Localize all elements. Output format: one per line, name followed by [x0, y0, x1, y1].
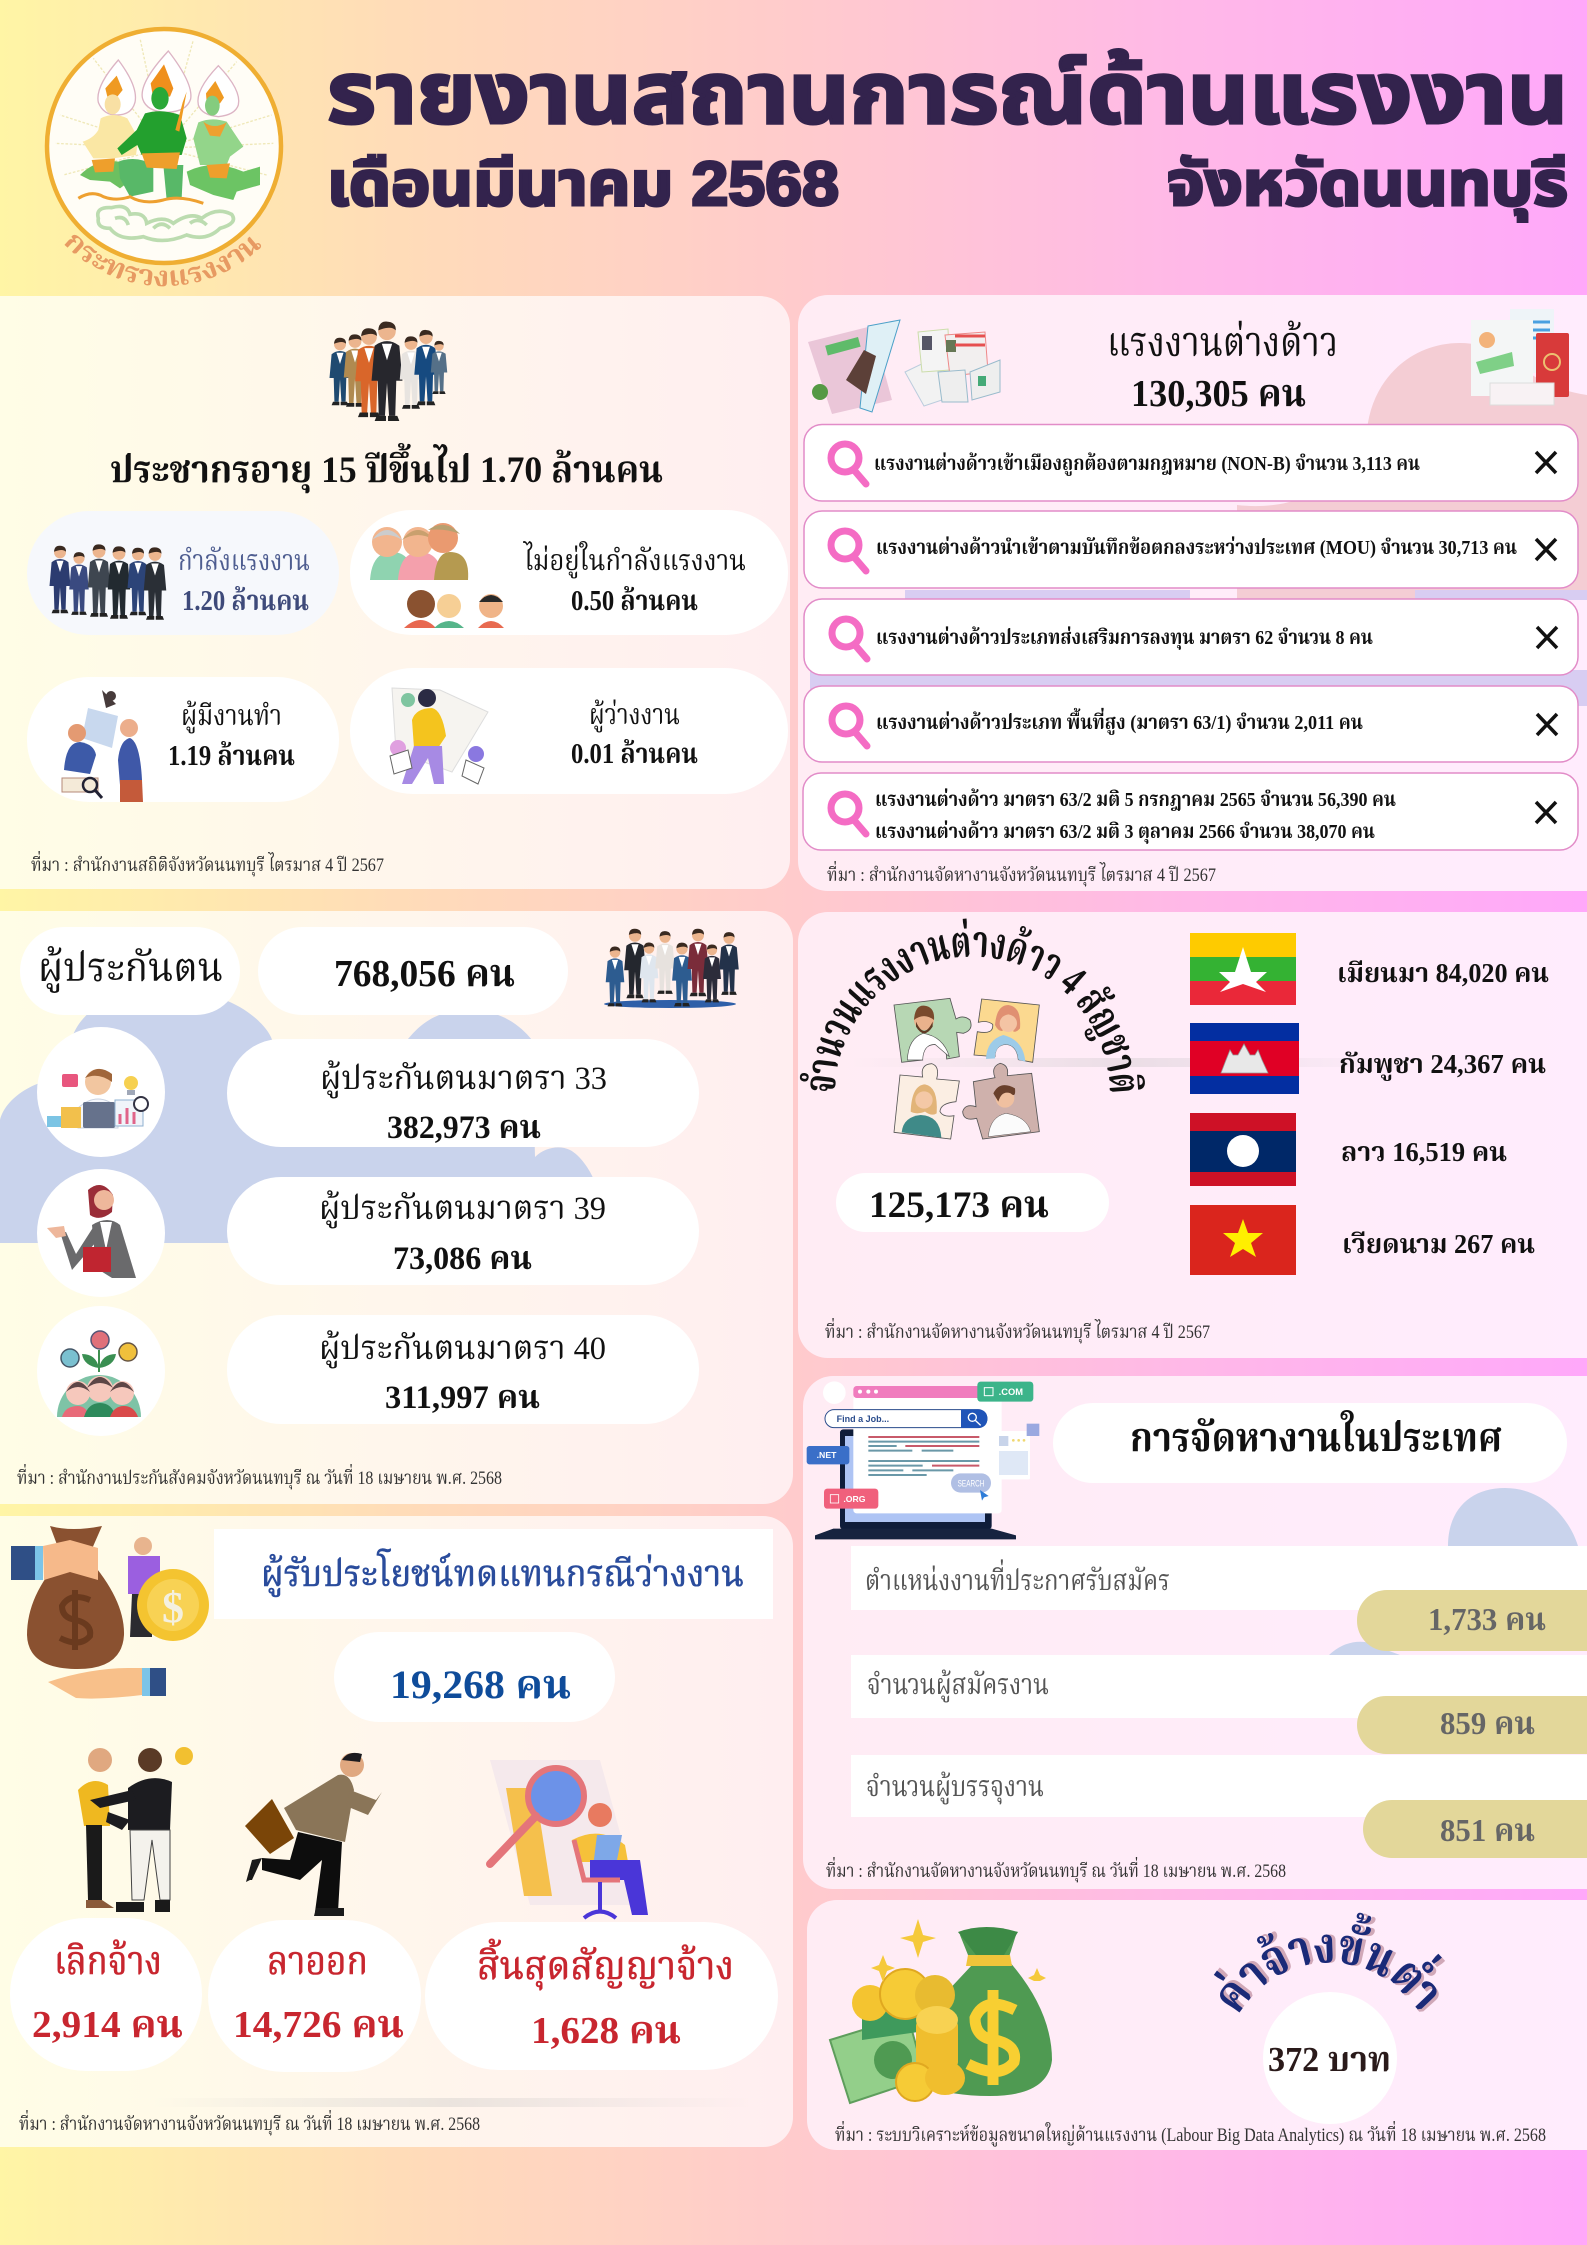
pill: section 39 [227, 1177, 699, 1285]
row: vacancies: 1,733 คน [1428, 1601, 1546, 1637]
icon: laptop job search: SEARCH [958, 1479, 984, 1489]
pill: benefit total: 19,268 คน [390, 1662, 571, 1707]
panel: domestic job placement [803, 1376, 1587, 1889]
flag: Myanmar [1190, 933, 1296, 1005]
list item: section 63/2: แรงงานต่างด้าว มาตรา 63/2 มติ 5 กรกฎาคม 2565 จำนวน 56,390 คน [875, 789, 1396, 811]
icon: occupations group [604, 929, 739, 1008]
pill: job placement heading [1053, 1403, 1567, 1483]
pill: dismissal: 2,914 คน [32, 2004, 183, 2046]
panel: minimum wage [807, 1900, 1587, 2150]
pill: contract end: 1,628 คน [531, 2010, 681, 2052]
icon: unemployed person with resumes [390, 688, 488, 784]
circle: minimum wage value [1263, 1992, 1397, 2124]
pill: section 33 [227, 1039, 699, 1147]
pill: benefit total [334, 1632, 615, 1722]
pill: resignation [208, 1920, 421, 2072]
flag: Cambodia [1190, 1023, 1299, 1094]
row: applicants: จำนวนผู้สมัครงาน [867, 1669, 1049, 1703]
panel: unemployment benefit [0, 1516, 793, 2147]
list item: section 62 [804, 599, 1578, 675]
icon: search [831, 794, 866, 834]
label: Myanmar: เมียนมา 84,020 คน [1337, 958, 1549, 988]
icon: laptop job search: .COM [999, 1387, 1023, 1397]
icon: employed people with documents [62, 690, 143, 802]
pill: insured total: 768,056 คน [334, 953, 515, 995]
icon: ministry of labour seal [44, 26, 284, 286]
pill: four nationalities total [836, 1173, 1109, 1232]
pill: section 39: ผู้ประกันตนมาตรา 39 [319, 1188, 606, 1230]
list item: section 63/2 [803, 773, 1578, 850]
icon: laptop job search: .ORG [843, 1494, 866, 1504]
pill: section 39: 73,086 คน [393, 1241, 532, 1277]
background blobs [810, 343, 1587, 706]
source note: ที่มา : สำนักงานจัดหางานจังหวัดนนทบุรี ไตรมาส 4 ปี 2567 [825, 1317, 1210, 1344]
title: รายงานสถานการณ์ด้านแรงงาน [327, 46, 1568, 142]
pill: outside labour force: ไม่อยู่ในกำลังแรงงาน [522, 541, 746, 579]
icon: search [831, 444, 866, 484]
flag: Vietnam [1190, 1205, 1296, 1275]
pill: insured heading: ผู้ประกันตน [38, 945, 223, 993]
avatar: section 33 worker [37, 1027, 165, 1157]
list item: MOU [804, 511, 1578, 588]
source note: ที่มา : สำนักงานจัดหางานจังหวัดนนทบุรี ณ วันที่ 18 เมษายน พ.ศ. 2568 [19, 2109, 480, 2136]
label: Laos: ลาว 16,519 คน [1341, 1137, 1507, 1167]
source note: ที่มา : สำนักงานประกันสังคมจังหวัดนนทบุรี ณ วันที่ 18 เมษายน พ.ศ. 2568 [17, 1463, 502, 1490]
pill: section 40: 311,997 คน [385, 1380, 540, 1416]
pill: employed: 1.19 ล้านคน [168, 741, 295, 772]
row: applicants [851, 1655, 1587, 1754]
curved heading: จำนวนแรงงานต่างด้าว 4 สัญชาติ [800, 918, 1145, 1092]
subtitle: month: เดือนมีนาคม 2568 [327, 150, 839, 219]
flag: Laos [1190, 1113, 1296, 1186]
icon: approved visa documents [808, 320, 900, 414]
panel: nationalities [798, 912, 1587, 1358]
pill: labour force [27, 511, 339, 635]
heading: foreign workers: แรงงานต่างด้าว [1107, 319, 1338, 365]
panel: foreign workers [798, 295, 1587, 891]
heading box: ผู้รับประโยชน์ทดแทนกรณีว่างงาน [261, 1548, 744, 1598]
icon: puzzle faces [894, 998, 1039, 1139]
pill: dismissal: เลิกจ้าง [54, 1939, 162, 1983]
curved heading shadow: ค่าจ้างขั้นต่ำ [1217, 1914, 1445, 2012]
background cloud [0, 990, 594, 1243]
icon: money bag with hands and coin [11, 1526, 209, 1699]
circle: minimum wage value: 372 บาท [1268, 2040, 1391, 2079]
row: vacancies: ตำแหน่งงานที่ประกาศรับสมัคร [865, 1559, 1170, 1597]
list item: MOU: แรงงานต่างด้าวนำเข้าตามบันทึกข้อตกลงระหว่างประเทศ (MOU) จำนวน 30,713 คน [876, 537, 1517, 559]
pill: section 40 [227, 1315, 699, 1424]
icon: resumes [905, 329, 1000, 406]
source note: ที่มา : สำนักงานจัดหางานจังหวัดนนทบุรี ณ วันที่ 18 เมษายน พ.ศ. 2568 [826, 1856, 1286, 1883]
curved heading: ค่าจ้างขั้นต่ำ [1214, 1912, 1442, 2012]
pill: resignation: 14,726 คน [233, 2004, 404, 2046]
pill: outside labour force [350, 510, 788, 635]
avatar: section 39 woman [37, 1169, 165, 1297]
icon: workers [50, 544, 166, 620]
panel: population [0, 296, 790, 889]
pill: unemployed [350, 668, 788, 794]
heading: population 15+: ประชากรอายุ 15 ปีขึ้นไป 1.70 ล้านคน [110, 442, 663, 494]
list item: section 63/2: แรงงานต่างด้าว มาตรา 63/2 มติ 3 ตุลาคม 2566 จำนวน 38,070 คน [875, 821, 1375, 844]
label: Cambodia: กัมพูชา 24,367 คน [1339, 1049, 1546, 1082]
pill: four nationalities total: 125,173 คน [869, 1185, 1049, 1226]
source note: ที่มา : สำนักงานจัดหางานจังหวัดนนทบุรี ไตรมาส 4 ปี 2567 [827, 860, 1216, 887]
subtitle: province: จังหวัดนนทบุรี [1167, 150, 1568, 221]
icon: laptop job search: .NET [817, 1450, 837, 1460]
icon: group of business people [330, 322, 447, 421]
icon: contract search [490, 1760, 648, 1918]
icon: search [831, 531, 866, 571]
pill: unemployed: ผู้ว่างงาน [589, 699, 680, 733]
pill: employed [27, 677, 339, 802]
icon: search [832, 706, 867, 746]
list item: NON-B [804, 424, 1578, 501]
pill: outside labour force: 0.50 ล้านคน [571, 586, 698, 617]
list item: section 62: แรงงานต่างด้าวประเภทส่งเสริมการลงทุน มาตรา 62 จำนวน 8 คน [876, 627, 1373, 650]
list item: highland [804, 686, 1578, 762]
background blobs [1329, 1488, 1578, 1655]
pill: section 33: 382,973 คน [387, 1110, 541, 1146]
pill: job placement heading: การจัดหางานในประเทศ [1130, 1409, 1502, 1460]
pill: insured heading [20, 927, 240, 1015]
pill: labour force: กำลังแรงงาน [178, 545, 310, 577]
icon: handshake dismissal [78, 1747, 193, 1912]
pill: insured total [258, 927, 568, 1015]
seal ring text: กระทรวงแรงงาน [64, 234, 262, 286]
icon: running man [245, 1753, 382, 1916]
pill: labour force: 1.20 ล้านคน [182, 586, 309, 617]
row: placements: จำนวนผู้บรรจุงาน [866, 1771, 1044, 1805]
icon: elderly and children [370, 523, 504, 628]
source note: ที่มา : สำนักงานสถิติจังหวัดนนทบุรี ไตรมาส 4 ปี 2567 [31, 850, 384, 877]
pill: section 33: ผู้ประกันตนมาตรา 33 [320, 1058, 607, 1100]
pill: contract end [425, 1922, 778, 2070]
row: placements: 851 คน [1440, 1812, 1535, 1848]
pill: contract end: สิ้นสุดสัญญาจ้าง [477, 1938, 734, 1991]
icon: money bag with hands and coin: $ [162, 1583, 184, 1632]
icon: passport and forms [1471, 309, 1569, 405]
icon: search [832, 619, 867, 659]
row: placements [851, 1755, 1587, 1858]
heading box [214, 1529, 773, 1619]
label: Vietnam: เวียดนาม 267 คน [1342, 1229, 1535, 1259]
list item: highland: แรงงานต่างด้าวประเภท พื้นที่สูง (มาตรา 63/1) จำนวน 2,011 คน [876, 707, 1363, 735]
icon: laptop job search: Find a Job... [837, 1414, 889, 1424]
icon: money bag and coins [830, 1919, 1052, 2103]
total foreign workers: 130,305 คน [1131, 373, 1306, 415]
pill: resignation: ลาออก [267, 1940, 368, 1983]
pill: section 40: ผู้ประกันตนมาตรา 40 [319, 1328, 606, 1370]
pill: dismissal [10, 1918, 202, 2071]
row: vacancies [851, 1546, 1587, 1651]
avatar: section 40 group [37, 1306, 165, 1436]
list item: NON-B: แรงงานต่างด้าวเข้าเมืองถูกต้องตามกฎหมาย (NON-B) จำนวน 3,113 คน [874, 453, 1420, 476]
pill: employed: ผู้มีงานทำ [181, 700, 282, 734]
panel: insured persons [0, 911, 793, 1504]
row: applicants: 859 คน [1440, 1705, 1535, 1741]
pill: unemployed: 0.01 ล้านคน [571, 739, 698, 770]
icon: laptop job search [807, 1381, 1039, 1539]
header [44, 26, 1568, 286]
